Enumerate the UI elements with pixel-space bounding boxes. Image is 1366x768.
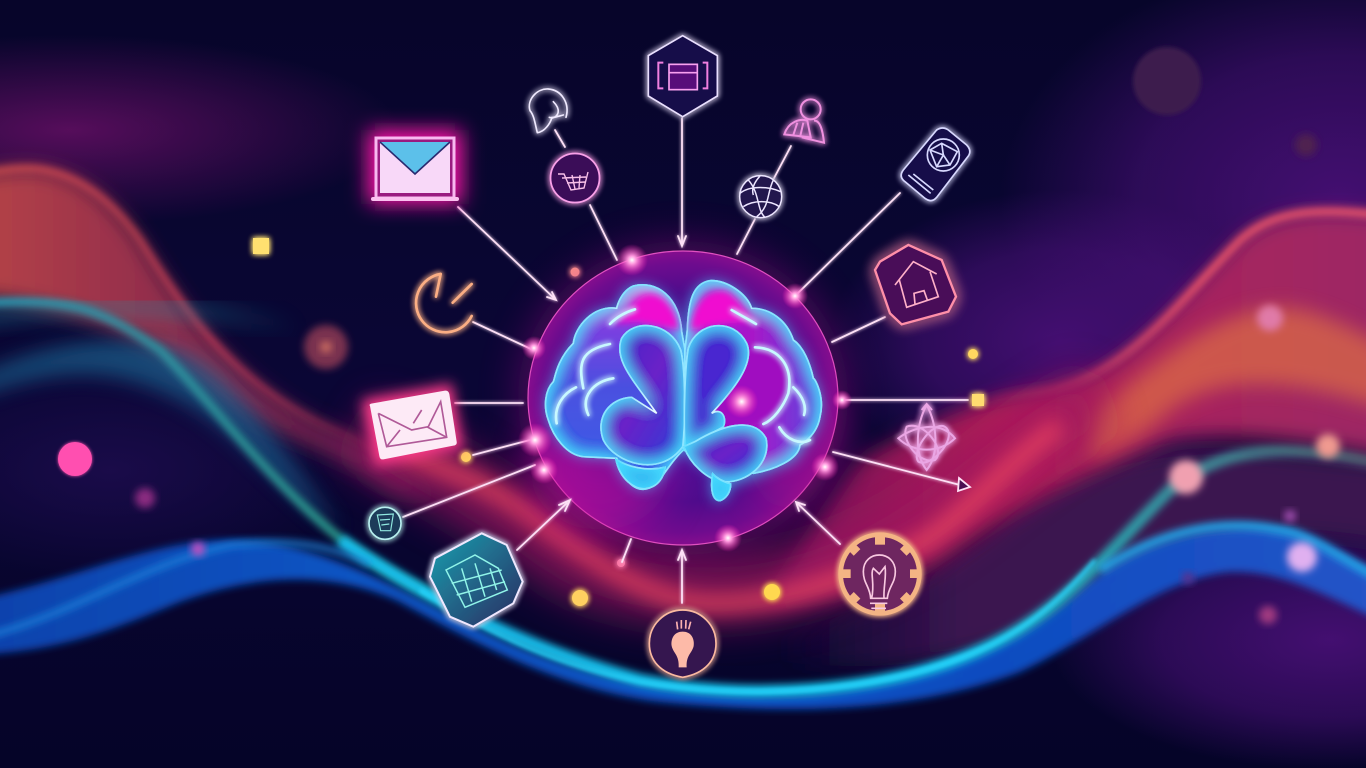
- icon: head profile: [529, 89, 567, 133]
- icon: house hexagon: [875, 245, 956, 324]
- floating particles: [58, 238, 1340, 624]
- wave: plum underlayer right: [780, 447, 1366, 666]
- icon: person: [784, 99, 824, 143]
- decorative dim circles: [1133, 47, 1317, 156]
- icon: globe: [740, 176, 782, 218]
- right hemisphere: [683, 281, 821, 473]
- wave: right red ribbon: [760, 211, 1366, 603]
- lower right lobe: [684, 425, 767, 482]
- icon: knot atom: [898, 404, 955, 470]
- icon: timer dial: [416, 274, 472, 332]
- icon: document octagon: [430, 533, 523, 627]
- icon: white envelope card: [362, 383, 463, 467]
- icon: shopping cart circle: [550, 154, 600, 202]
- icon: calendar hexagon: [648, 36, 717, 117]
- brain: [546, 281, 821, 502]
- right lobe fold: [697, 348, 788, 443]
- icon: bulb circle: [649, 610, 716, 677]
- bottom drip lobes: [616, 459, 731, 501]
- central right lobe: [684, 326, 748, 447]
- icon: gear bulb: [841, 535, 919, 613]
- arrow: outgoing hollow head: [958, 478, 970, 491]
- icon: phone card: [901, 128, 970, 201]
- connector lines: [403, 118, 968, 603]
- central left lobe: [601, 326, 685, 465]
- fold lines: [556, 309, 810, 442]
- icon: mail laptop: [368, 130, 462, 204]
- wave: left red ribbon: [0, 168, 440, 500]
- brain glow: [546, 281, 821, 502]
- sparks on sphere edge: [518, 244, 852, 552]
- magenta hotspot: [725, 385, 758, 418]
- icon: small badge circle: [369, 507, 401, 539]
- wave: blue ribbon: [0, 451, 1366, 709]
- wave: left teal ribbon: [0, 302, 480, 620]
- wave: center red ribbon: [360, 400, 1100, 604]
- top magenta lobes: [613, 291, 753, 330]
- central sphere: [518, 241, 848, 555]
- icon: yellow square: [972, 394, 984, 406]
- left hemisphere: [546, 285, 685, 489]
